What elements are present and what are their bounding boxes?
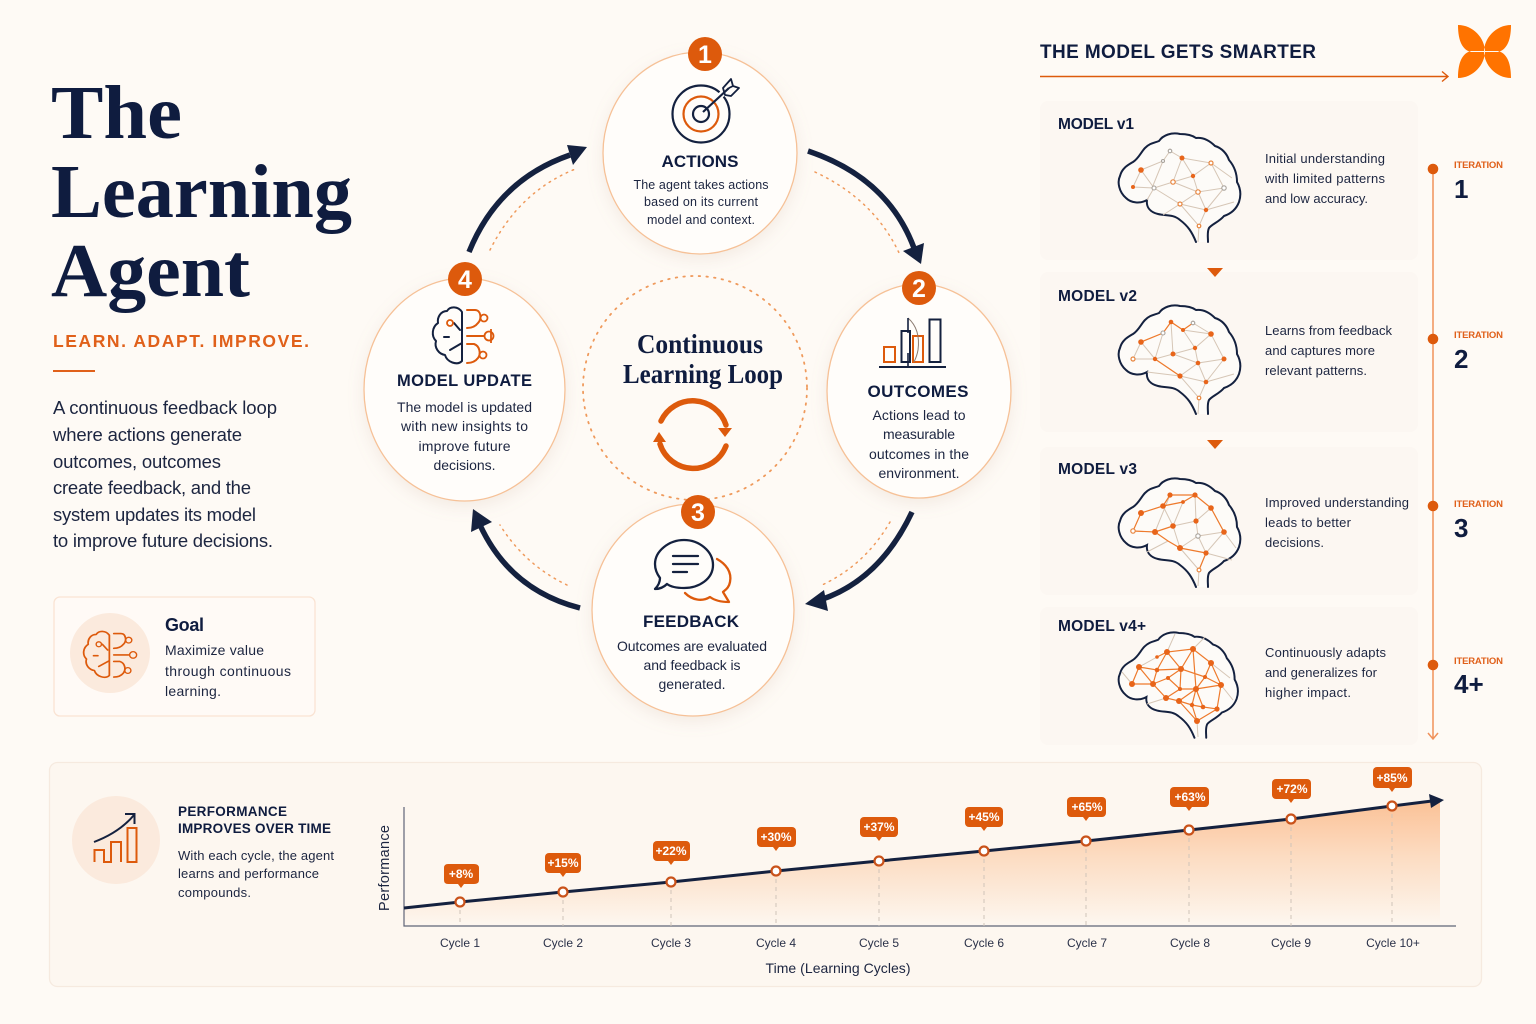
panel: feedback [592, 495, 794, 716]
x axis title: Time (Learning Cycles) [766, 960, 910, 976]
brain v3 [1119, 478, 1240, 587]
intro text: system updates its model [53, 504, 256, 525]
panel: model update [364, 262, 565, 501]
value labels: +8% [449, 867, 474, 881]
value labels: +30% [760, 830, 792, 844]
panel: outcomes [827, 271, 1011, 498]
badge 3: 3 [691, 499, 705, 527]
badge 1 [688, 37, 722, 71]
title: Learning [51, 150, 352, 234]
center loop [583, 276, 807, 500]
actions text: The agent takes actions [634, 178, 768, 192]
arrow: outcomes to feedback [805, 512, 912, 611]
panel: performance [50, 762, 1482, 986]
badge 2: 2 [912, 275, 926, 303]
model v3 text: Improved understanding [1265, 495, 1409, 510]
center loop: Learning Loop [623, 359, 783, 389]
goal text: learning. [165, 683, 221, 699]
model v2 text: Learns from feedback [1265, 323, 1392, 338]
logo [1458, 25, 1511, 78]
panel: actions [603, 37, 797, 254]
panel: model v3 [1040, 447, 1418, 595]
loop arrows [469, 145, 924, 611]
y axis title: Performance [377, 825, 393, 911]
feedback text: Outcomes are evaluated [617, 638, 767, 654]
goal heading: Goal [165, 615, 204, 635]
model v1 text [1264, 151, 1386, 206]
x axis labels [440, 936, 1420, 950]
center loop: Continuous [637, 329, 763, 359]
actions text [634, 178, 768, 227]
iteration timeline: 4+ [1454, 669, 1484, 699]
x axis labels: Cycle 8 [1170, 936, 1210, 950]
value labels: +22% [655, 844, 687, 858]
intro text: where actions generate [52, 424, 242, 445]
value labels: +45% [968, 810, 1000, 824]
performance text: With each cycle, the agent [178, 848, 334, 863]
model v4 text [1265, 645, 1386, 700]
title [51, 71, 352, 313]
badge 2 [902, 271, 936, 305]
model v1 text: with limited patterns [1264, 171, 1386, 186]
x axis labels: Cycle 1 [440, 936, 480, 950]
badge 4 [448, 262, 482, 296]
x axis labels: Cycle 2 [543, 936, 583, 950]
arrow: actions to outcomes [808, 151, 924, 264]
outcomes text: outcomes in the [869, 446, 969, 462]
heading: the model gets smarter [1040, 42, 1448, 82]
brain v4 [1119, 632, 1238, 738]
intro text: A continuous feedback loop [53, 397, 277, 418]
model update text: improve future [418, 438, 511, 454]
panel: model v2 [1040, 272, 1418, 432]
value labels [444, 767, 1412, 888]
arrow: update to actions [469, 145, 587, 252]
model v3 title: MODEL v3 [1058, 461, 1137, 478]
performance text: learns and performance [178, 866, 319, 881]
iteration timeline [1428, 160, 1503, 739]
model update text: decisions. [434, 457, 496, 473]
badge 1: 1 [698, 41, 712, 69]
performance text: compounds. [178, 885, 251, 900]
value labels: +72% [1276, 782, 1308, 796]
performance heading: IMPROVES OVER TIME [178, 821, 331, 836]
value labels: +85% [1376, 771, 1408, 785]
feedback text: and feedback is [644, 657, 740, 673]
badge 3 [681, 495, 715, 529]
title: The [51, 71, 182, 155]
icon: brain network [433, 307, 494, 363]
arrow: v2 to v3 [1207, 440, 1223, 449]
model update text: with new insights to [400, 418, 528, 434]
icon: cycle arrows [653, 401, 732, 468]
model v2 text: and captures more [1265, 343, 1375, 358]
goal text: Maximize value [165, 642, 264, 658]
actions heading: ACTIONS [662, 152, 738, 171]
model v3 text: leads to better [1265, 515, 1352, 530]
panel: goal [54, 597, 315, 716]
iteration timeline: ITERATION [1454, 330, 1503, 341]
heading: the model gets smarter: THE MODEL GETS SMARTER [1040, 42, 1316, 63]
model v2 text: relevant patterns. [1265, 363, 1367, 378]
outcomes text [869, 407, 969, 481]
tagline: LEARN. ADAPT. IMPROVE. [53, 331, 309, 351]
model v3 text: decisions. [1265, 535, 1324, 550]
panel: model v1 [1040, 101, 1418, 260]
title: Agent [51, 229, 250, 313]
arrow: feedback to update [471, 509, 580, 608]
outcomes text: measurable [883, 426, 955, 442]
data points [456, 802, 1396, 906]
goal text [165, 642, 291, 699]
model v1 text: and low accuracy. [1265, 191, 1368, 206]
x axis labels: Cycle 6 [964, 936, 1004, 950]
model v2 title: MODEL v2 [1058, 288, 1137, 305]
intro text: outcomes, outcomes [53, 451, 221, 472]
model update text: The model is updated [397, 399, 532, 415]
x axis labels: Cycle 5 [859, 936, 899, 950]
feedback text [617, 638, 767, 692]
line chart [377, 767, 1456, 976]
intro text [52, 397, 277, 551]
model v4 text: and generalizes for [1265, 665, 1378, 680]
icon: goal brain [70, 613, 150, 693]
x axis labels: Cycle 4 [756, 936, 796, 950]
brain v2 [1119, 305, 1240, 414]
intro text: to improve future decisions. [53, 530, 273, 551]
performance text [178, 848, 334, 900]
value labels: +37% [863, 820, 895, 834]
actions text: based on its current [644, 195, 759, 209]
outcomes text: Actions lead to [872, 407, 966, 423]
model update text [397, 399, 532, 473]
model v4 text: higher impact. [1265, 685, 1351, 700]
value labels: +63% [1174, 790, 1206, 804]
iteration timeline: ITERATION [1454, 656, 1503, 667]
arrow: v1 to v2 [1207, 268, 1223, 277]
icon: target [672, 79, 739, 142]
badge 4: 4 [458, 266, 472, 294]
model v1 text: Initial understanding [1265, 151, 1385, 166]
intro text: create feedback, and the [53, 477, 251, 498]
feedback text: generated. [658, 676, 726, 692]
performance heading: PERFORMANCE [178, 804, 287, 819]
x axis labels: Cycle 3 [651, 936, 691, 950]
iteration timeline: 2 [1454, 344, 1468, 374]
icon: growth chart [72, 796, 160, 884]
goal text: through continuous [165, 663, 291, 679]
model v2 text [1265, 323, 1392, 378]
x axis labels: Cycle 9 [1271, 936, 1311, 950]
outcomes heading: OUTCOMES [868, 382, 968, 401]
model v4 text: Continuously adapts [1265, 645, 1386, 660]
value labels: +15% [547, 856, 579, 870]
trend line [404, 794, 1444, 908]
iteration timeline: ITERATION [1454, 160, 1503, 171]
feedback heading: FEEDBACK [643, 612, 740, 631]
model v1 title: MODEL v1 [1058, 116, 1134, 133]
model v3 text [1265, 495, 1409, 550]
icon: bar chart [879, 318, 946, 367]
iteration timeline: 1 [1454, 174, 1468, 204]
outcomes text: environment. [878, 465, 960, 481]
model update heading: MODEL UPDATE [397, 372, 532, 390]
model v4 title: MODEL v4+ [1058, 618, 1146, 635]
x axis labels: Cycle 10+ [1366, 936, 1420, 950]
performance heading [178, 804, 331, 836]
x axis labels: Cycle 7 [1067, 936, 1107, 950]
panel: model v4+ [1040, 607, 1418, 745]
iteration timeline: 3 [1454, 513, 1468, 543]
actions text: model and context. [647, 213, 755, 227]
icon: speech bubbles [655, 540, 730, 602]
iteration timeline: ITERATION [1454, 499, 1503, 510]
brain v1 [1119, 133, 1240, 242]
value labels: +65% [1071, 800, 1103, 814]
